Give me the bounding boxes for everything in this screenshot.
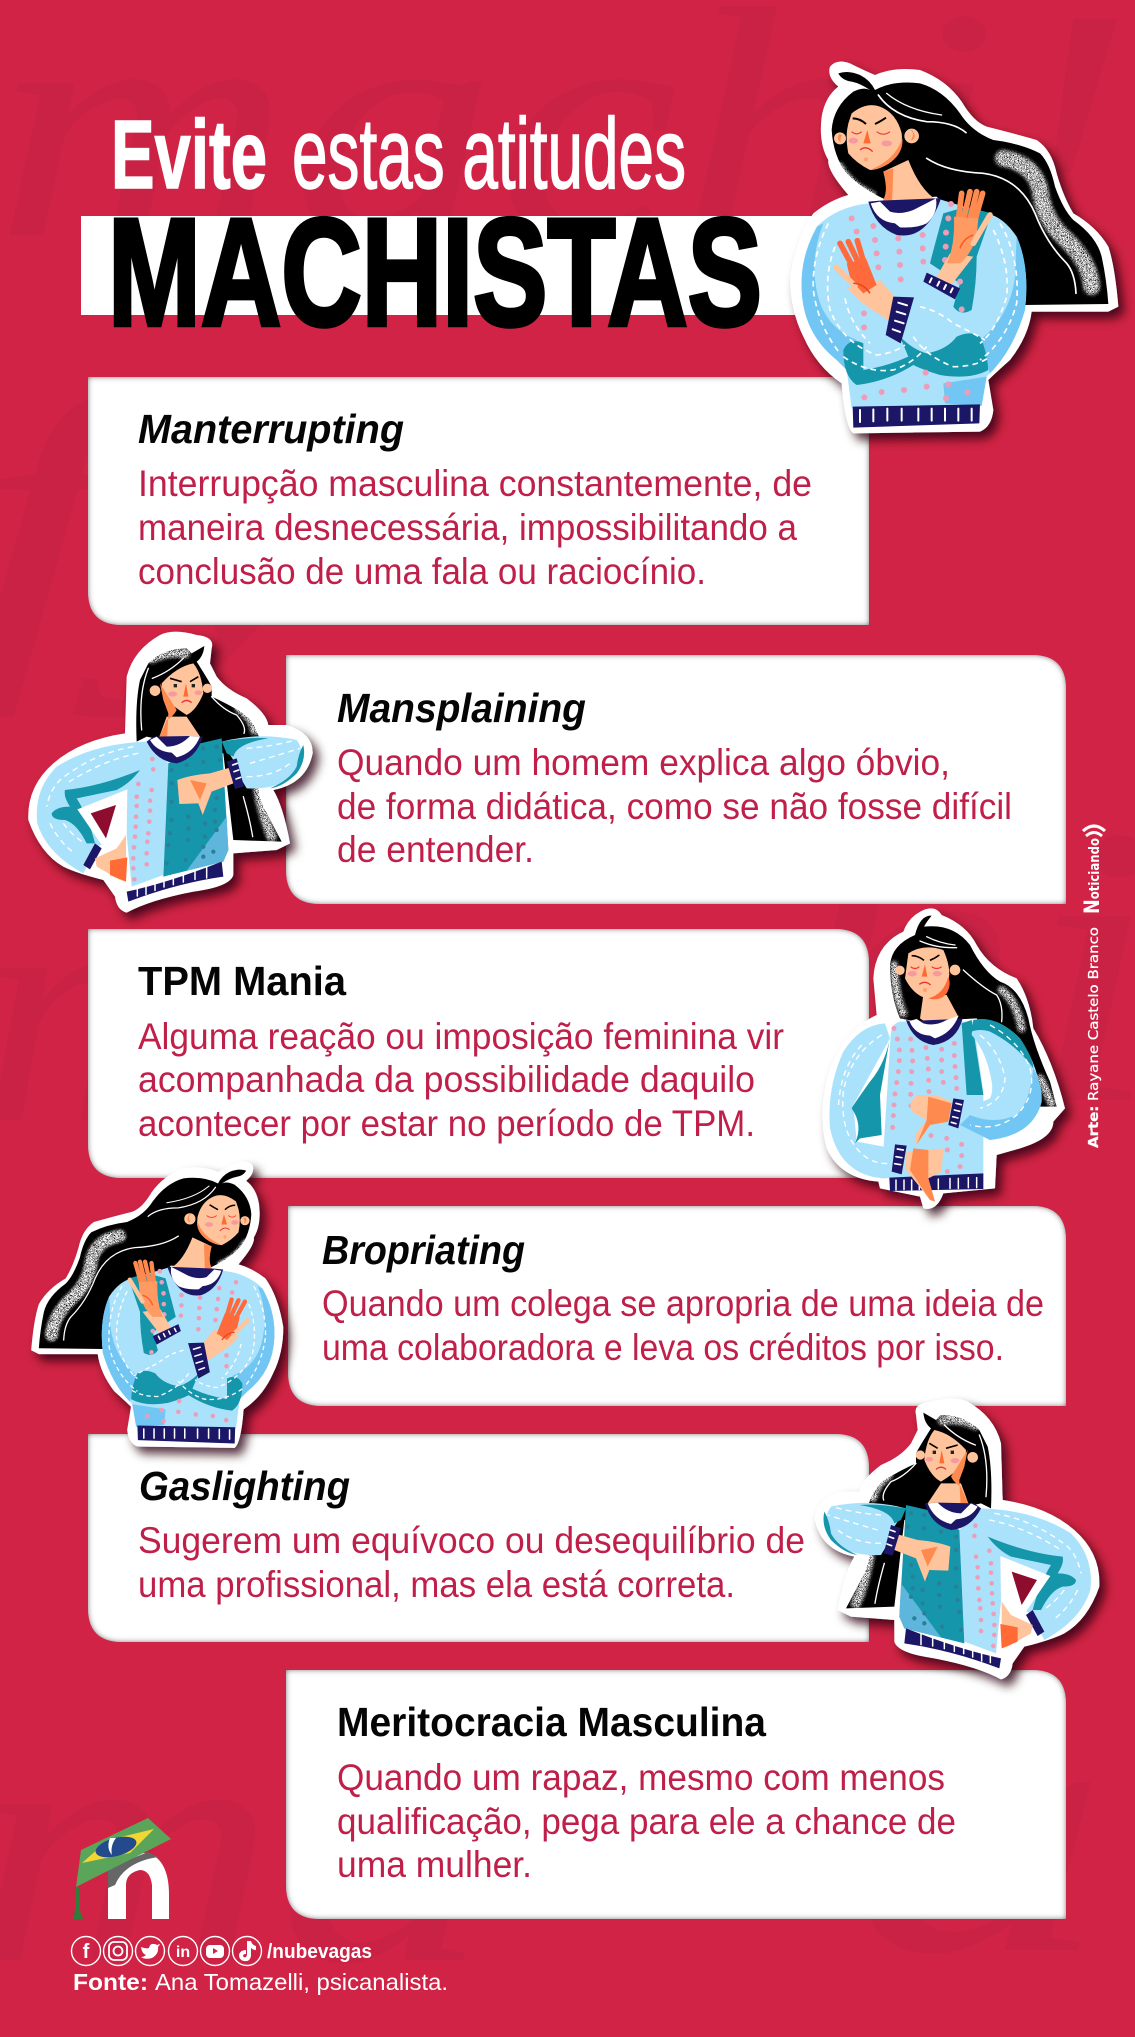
panel: Meritocracia Masculina xyxy=(286,1670,1066,1919)
panel: TPM Mania: acompanhada da possibilidade daquilo xyxy=(138,1059,755,1100)
panel: Gaslighting: Sugerem um equívoco ou desequilíbrio de xyxy=(138,1520,805,1561)
panel: Manterrupting: Manterrupting xyxy=(138,406,404,452)
panel: Gaslighting: Gaslighting xyxy=(139,1463,350,1509)
panel: Manterrupting xyxy=(88,377,869,625)
title: MACHISTAS: MACHISTAS xyxy=(108,187,762,358)
panel: Mansplaining: Mansplaining xyxy=(337,685,586,731)
panel: Bropriating: uma colaboradora e leva os créditos por isso. xyxy=(322,1327,1004,1368)
panel: Mansplaining xyxy=(286,655,1066,904)
title band: white strip xyxy=(81,216,841,315)
panel: Bropriating xyxy=(288,1206,1066,1406)
illustration: woman two thumbs down (TPM Mania) xyxy=(822,908,1065,1209)
background watermark lettering: hi xyxy=(780,744,1135,1187)
panel: Mansplaining: de entender. xyxy=(337,829,534,870)
title: Evite estas atitudes: estas atitudes xyxy=(292,98,686,210)
panel: Bropriating: Quando um colega se apropria de uma ideia de xyxy=(322,1283,1044,1324)
panel: Meritocracia Masculina: qualificação, pega para ele a chance de xyxy=(337,1801,956,1842)
illustration: woman thumbs down (Mansplaining) xyxy=(28,632,313,913)
background watermark lettering: a xyxy=(850,1629,1110,2028)
panel: Mansplaining: de forma didática, como se não fosse difícil xyxy=(337,786,1012,827)
panel: TPM Mania: acontecer por estar no período de TPM. xyxy=(138,1103,755,1144)
social icons row and handle: f xyxy=(83,1941,90,1963)
panel: Manterrupting: maneira desnecessária, impossibilitando a xyxy=(138,507,797,548)
panel: TPM Mania xyxy=(88,929,869,1178)
illustration: woman crossing arms (title) xyxy=(790,61,1118,433)
vertical credit: Arte: Rayane Castelo Branco xyxy=(1086,927,1102,1148)
source text: Fonte: xyxy=(73,1969,148,1995)
panel: Manterrupting: conclusão de uma fala ou raciocínio. xyxy=(138,551,706,592)
panel: Meritocracia Masculina: Quando um rapaz, mesmo com menos xyxy=(337,1757,945,1798)
title: Evite estas atitudes xyxy=(111,98,686,210)
social icons row and handle: /nubevagas xyxy=(267,1941,372,1963)
social icons row and handle xyxy=(72,1936,372,1966)
logo: graduation cap and n xyxy=(73,1818,171,1919)
source text: Ana Tomazelli, psicanalista. xyxy=(155,1969,448,1995)
panel: Gaslighting: uma profissional, mas ela está correta. xyxy=(138,1564,735,1605)
panel: Mansplaining: Quando um homem explica algo óbvio, xyxy=(337,742,950,783)
panel: Meritocracia Masculina: Meritocracia Masculina xyxy=(337,1699,767,1745)
illustration: woman thumbs down mirrored (Gaslighting) xyxy=(815,1398,1099,1679)
panel: TPM Mania: TPM Mania xyxy=(138,958,347,1004)
panel: Gaslighting xyxy=(88,1434,869,1642)
panel: Meritocracia Masculina: uma mulher. xyxy=(337,1844,532,1885)
social icons row and handle: in xyxy=(176,1944,190,1961)
illustration: woman crossing arms mirrored (Bropriating) xyxy=(31,1161,283,1448)
panel: Bropriating: Bropriating xyxy=(322,1227,525,1273)
panel: TPM Mania: Alguma reação ou imposição feminina vir xyxy=(138,1016,784,1057)
title: Evite estas atitudes: Evite xyxy=(111,100,267,209)
panel: Manterrupting: Interrupção masculina constantemente, de xyxy=(138,463,812,504)
vertical credit xyxy=(1080,826,1105,1148)
vertical credit: Noticiando xyxy=(1080,838,1104,914)
